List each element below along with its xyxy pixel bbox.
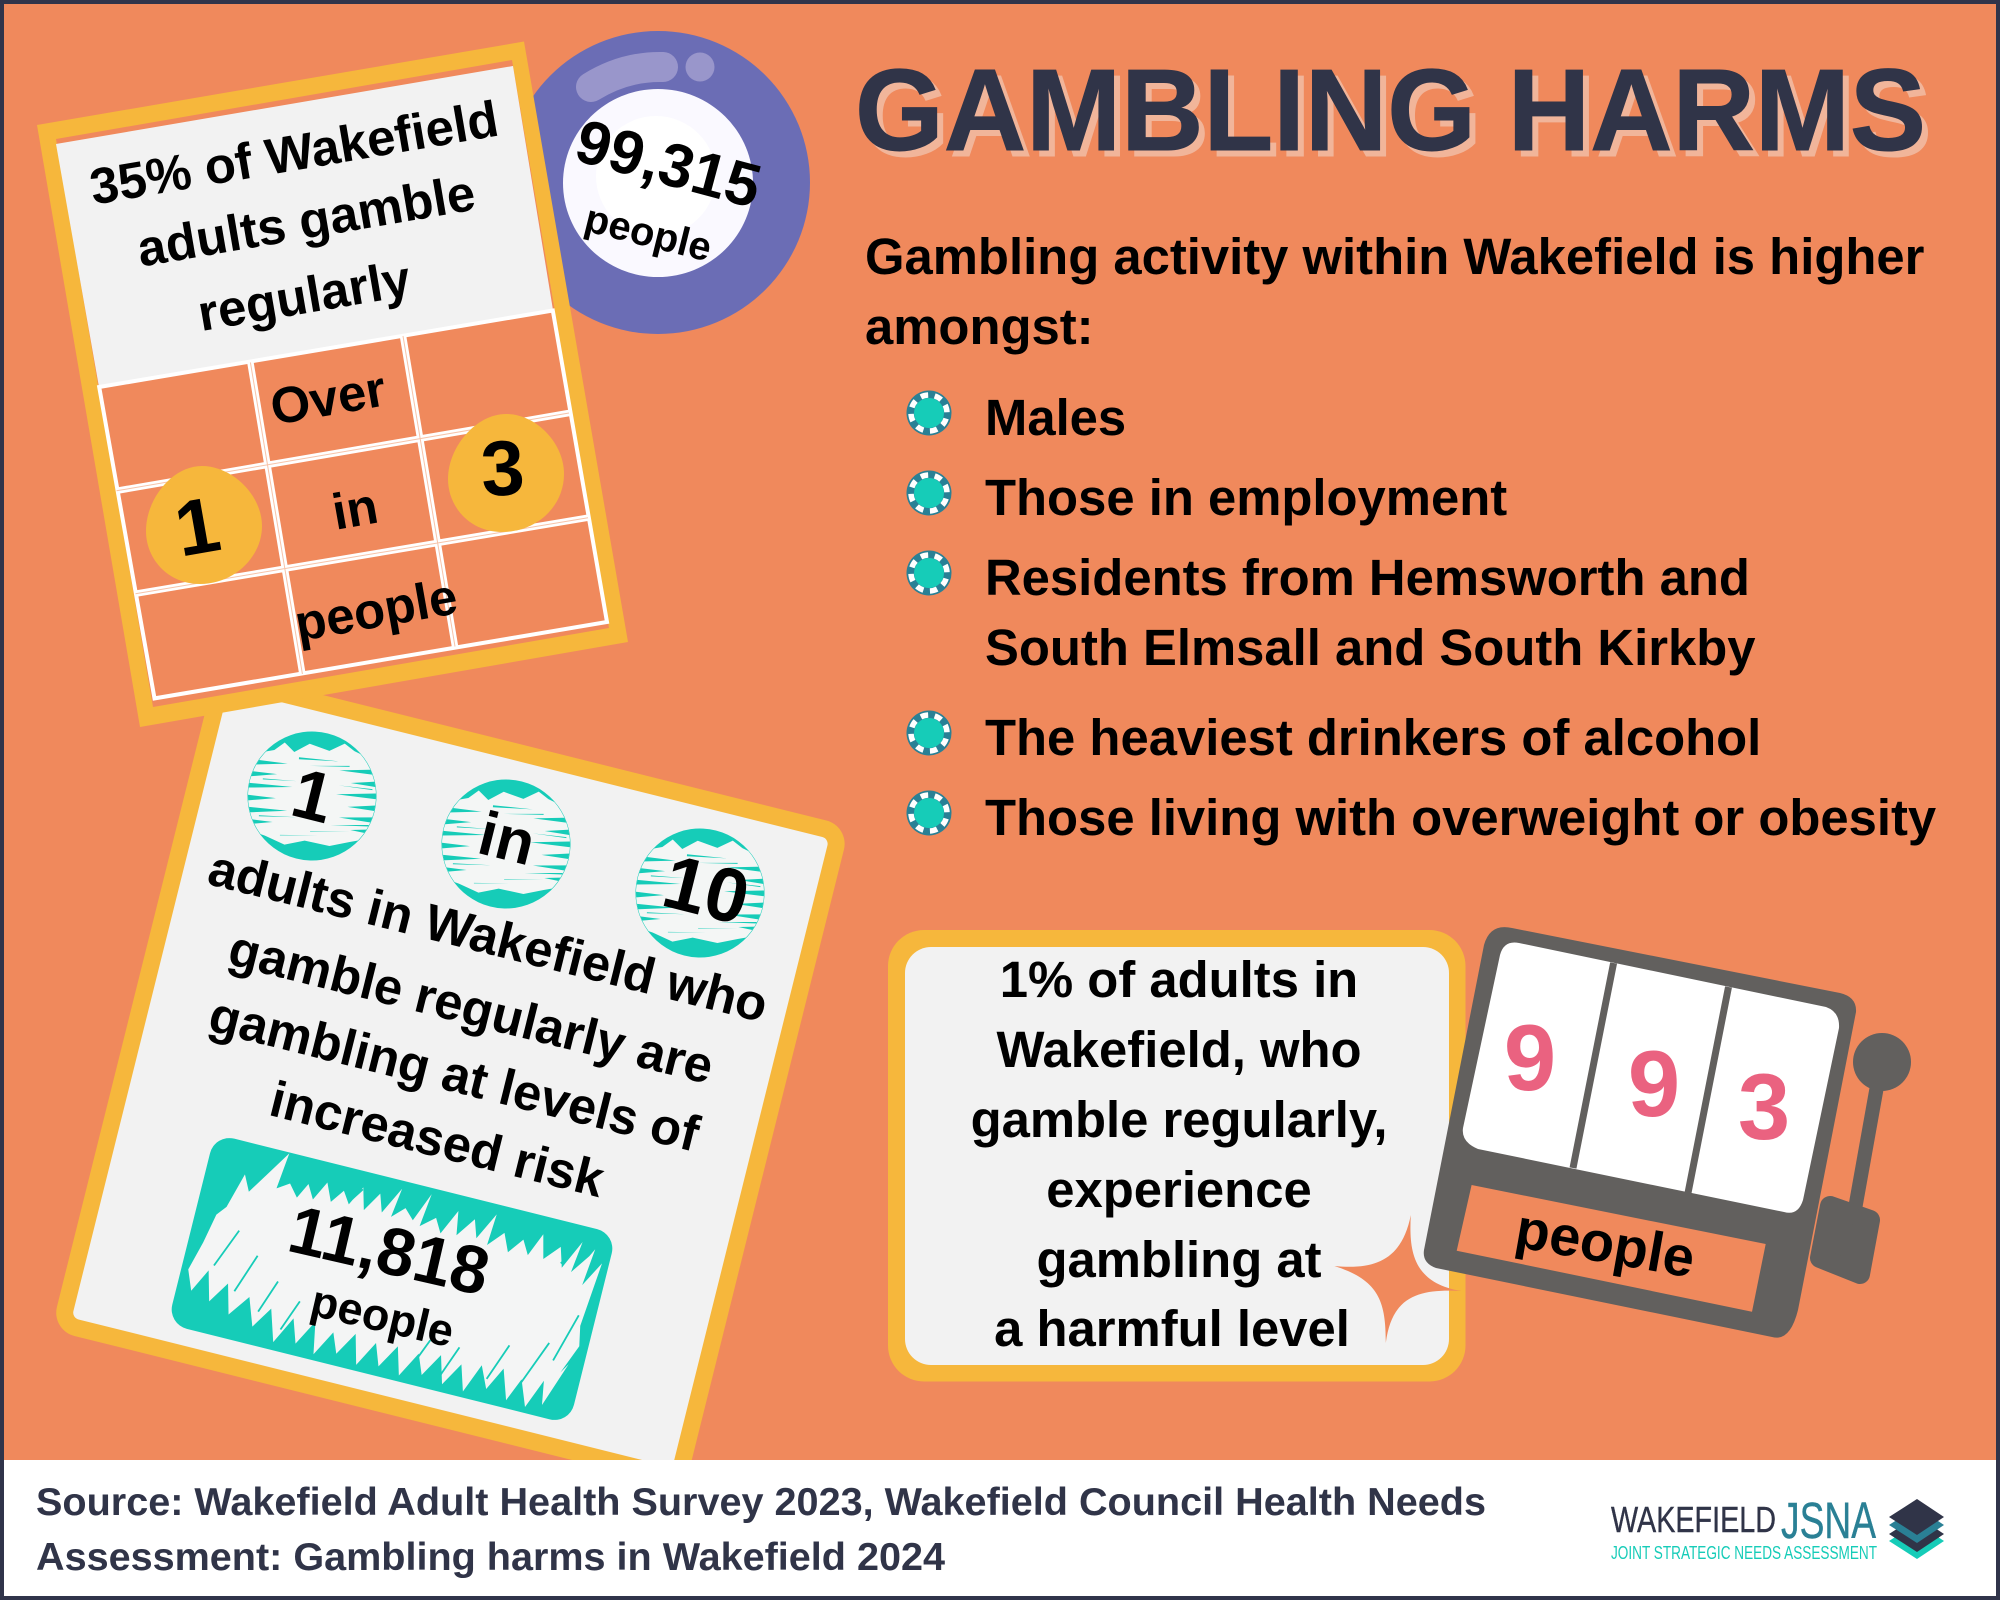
callout: 11,818 people: 11,818 — [282, 1192, 496, 1310]
callout: 11,818 people: people — [306, 1275, 459, 1357]
bullet: Those in employment: Those in employment — [985, 469, 1507, 526]
text: headline of card: 35% of Wakefield — [86, 90, 502, 216]
reel digits — [1504, 1005, 1790, 1159]
poker ball: 99,315 people: 99,315 — [569, 107, 768, 222]
text: Over: Over — [266, 360, 390, 436]
reel window — [1463, 942, 1839, 1213]
title: GAMBLING HARMS — [855, 45, 1926, 175]
bullet: overweight or obesity: Those living with overweight or obesity — [985, 789, 1936, 846]
text: callout body: 1% of adults in — [1000, 951, 1358, 1008]
icon: hatched circle with 1: 1 — [284, 753, 341, 838]
poker ball: 99,315 people: people — [580, 196, 716, 270]
bullet: Residents: Residents from Hemsworth and — [985, 549, 1750, 606]
text: adults who gamble at increased risk: adults in Wakefield who — [203, 839, 774, 1033]
icon: sparkle — [1334, 1215, 1462, 1343]
list: groups with higher gambling activity — [906, 389, 1936, 846]
logo: Wakefield JSNA: WAKEFIELD — [1611, 1499, 1776, 1540]
people label — [1457, 1185, 1766, 1312]
icon: yellow blob 1 — [146, 466, 262, 584]
reel digits: 3 — [1738, 1054, 1790, 1159]
reel digits: 9 — [1628, 1031, 1680, 1136]
footer panel — [0, 1460, 2000, 1600]
text: callout body: a harmful level — [994, 1300, 1350, 1357]
text: in: in — [328, 477, 382, 541]
logo: Wakefield JSNA: JSNA — [1781, 1492, 1876, 1549]
text: adults who gamble at increased risk: gamble regularly are — [223, 919, 719, 1095]
icon: yellow blob 1: 1 — [168, 479, 226, 574]
panel: 1 in 10 adults at increased risk — [51, 668, 850, 1488]
text: headline of card: regularly — [193, 250, 415, 342]
text: callout body: Wakefield, who — [996, 1021, 1362, 1078]
text: adults who gamble at increased risk: gambling at levels of — [204, 986, 706, 1163]
icon: hatched circle with 10 — [631, 825, 769, 961]
people label: people — [1511, 1196, 1700, 1289]
icon: yellow blob 3: 3 — [479, 423, 527, 513]
source text — [36, 1481, 1486, 1579]
intro text — [865, 228, 1924, 355]
lever — [1820, 1033, 1911, 1274]
title: GAMBLING HARMS — [861, 51, 1932, 181]
icon: hatched circle with in — [437, 776, 575, 912]
icon: hatched circle with 1 — [243, 728, 381, 864]
bullet: Males — [906, 389, 1126, 446]
bullet: Residents: South Elmsall and South Kirkby — [985, 619, 1756, 676]
machine body — [1424, 927, 1856, 1338]
icon: hatched circle with in: in — [472, 799, 542, 879]
intro text: amongst: — [865, 298, 1094, 355]
text: callout body: gamble regularly, — [971, 1091, 1387, 1148]
source text: Assessment: Gambling harms in Wakefield 2024 — [36, 1536, 945, 1579]
logo: Wakefield JSNA — [1611, 1492, 1944, 1563]
poker ball: 99,315 people — [506, 31, 810, 334]
bullet: heaviest drinkers: The heaviest drinkers of alcohol — [985, 709, 1761, 766]
text: headline of card — [86, 90, 502, 342]
intro text: Gambling activity within Wakefield is higher — [865, 228, 1924, 285]
text: people: people — [290, 567, 462, 652]
chart: 3 by 3 grid — [99, 310, 607, 698]
text: callout body: gambling at — [1036, 1231, 1322, 1288]
source text: Source: Wakefield Adult Health Survey 2023, Wakefield Council Health Needs — [36, 1481, 1486, 1524]
callout: 11,818 people — [167, 1134, 617, 1424]
bullet: Residents — [906, 549, 1756, 676]
panel: 35% of Wakefield adults gamble regularly — [37, 42, 628, 727]
icon: slot machine — [1424, 927, 1911, 1338]
icon: yellow blob 3 — [448, 414, 564, 532]
logo: Wakefield JSNA: JOINT STRATEGIC NEEDS ASSESSMENT — [1611, 1542, 1877, 1563]
icon: hatched circle with 10: 10 — [655, 839, 757, 942]
text: headline of card: adults gamble — [133, 164, 479, 278]
text: adults who gamble at increased risk: increased risk — [265, 1070, 611, 1208]
bullet: Males: Males — [985, 389, 1126, 446]
text: callout body — [971, 951, 1387, 1357]
text: callout body: experience — [1046, 1161, 1312, 1218]
panel: 1% of adults callout — [888, 930, 1466, 1382]
reel digits: 9 — [1504, 1005, 1556, 1110]
text: adults who gamble at increased risk — [203, 839, 774, 1208]
